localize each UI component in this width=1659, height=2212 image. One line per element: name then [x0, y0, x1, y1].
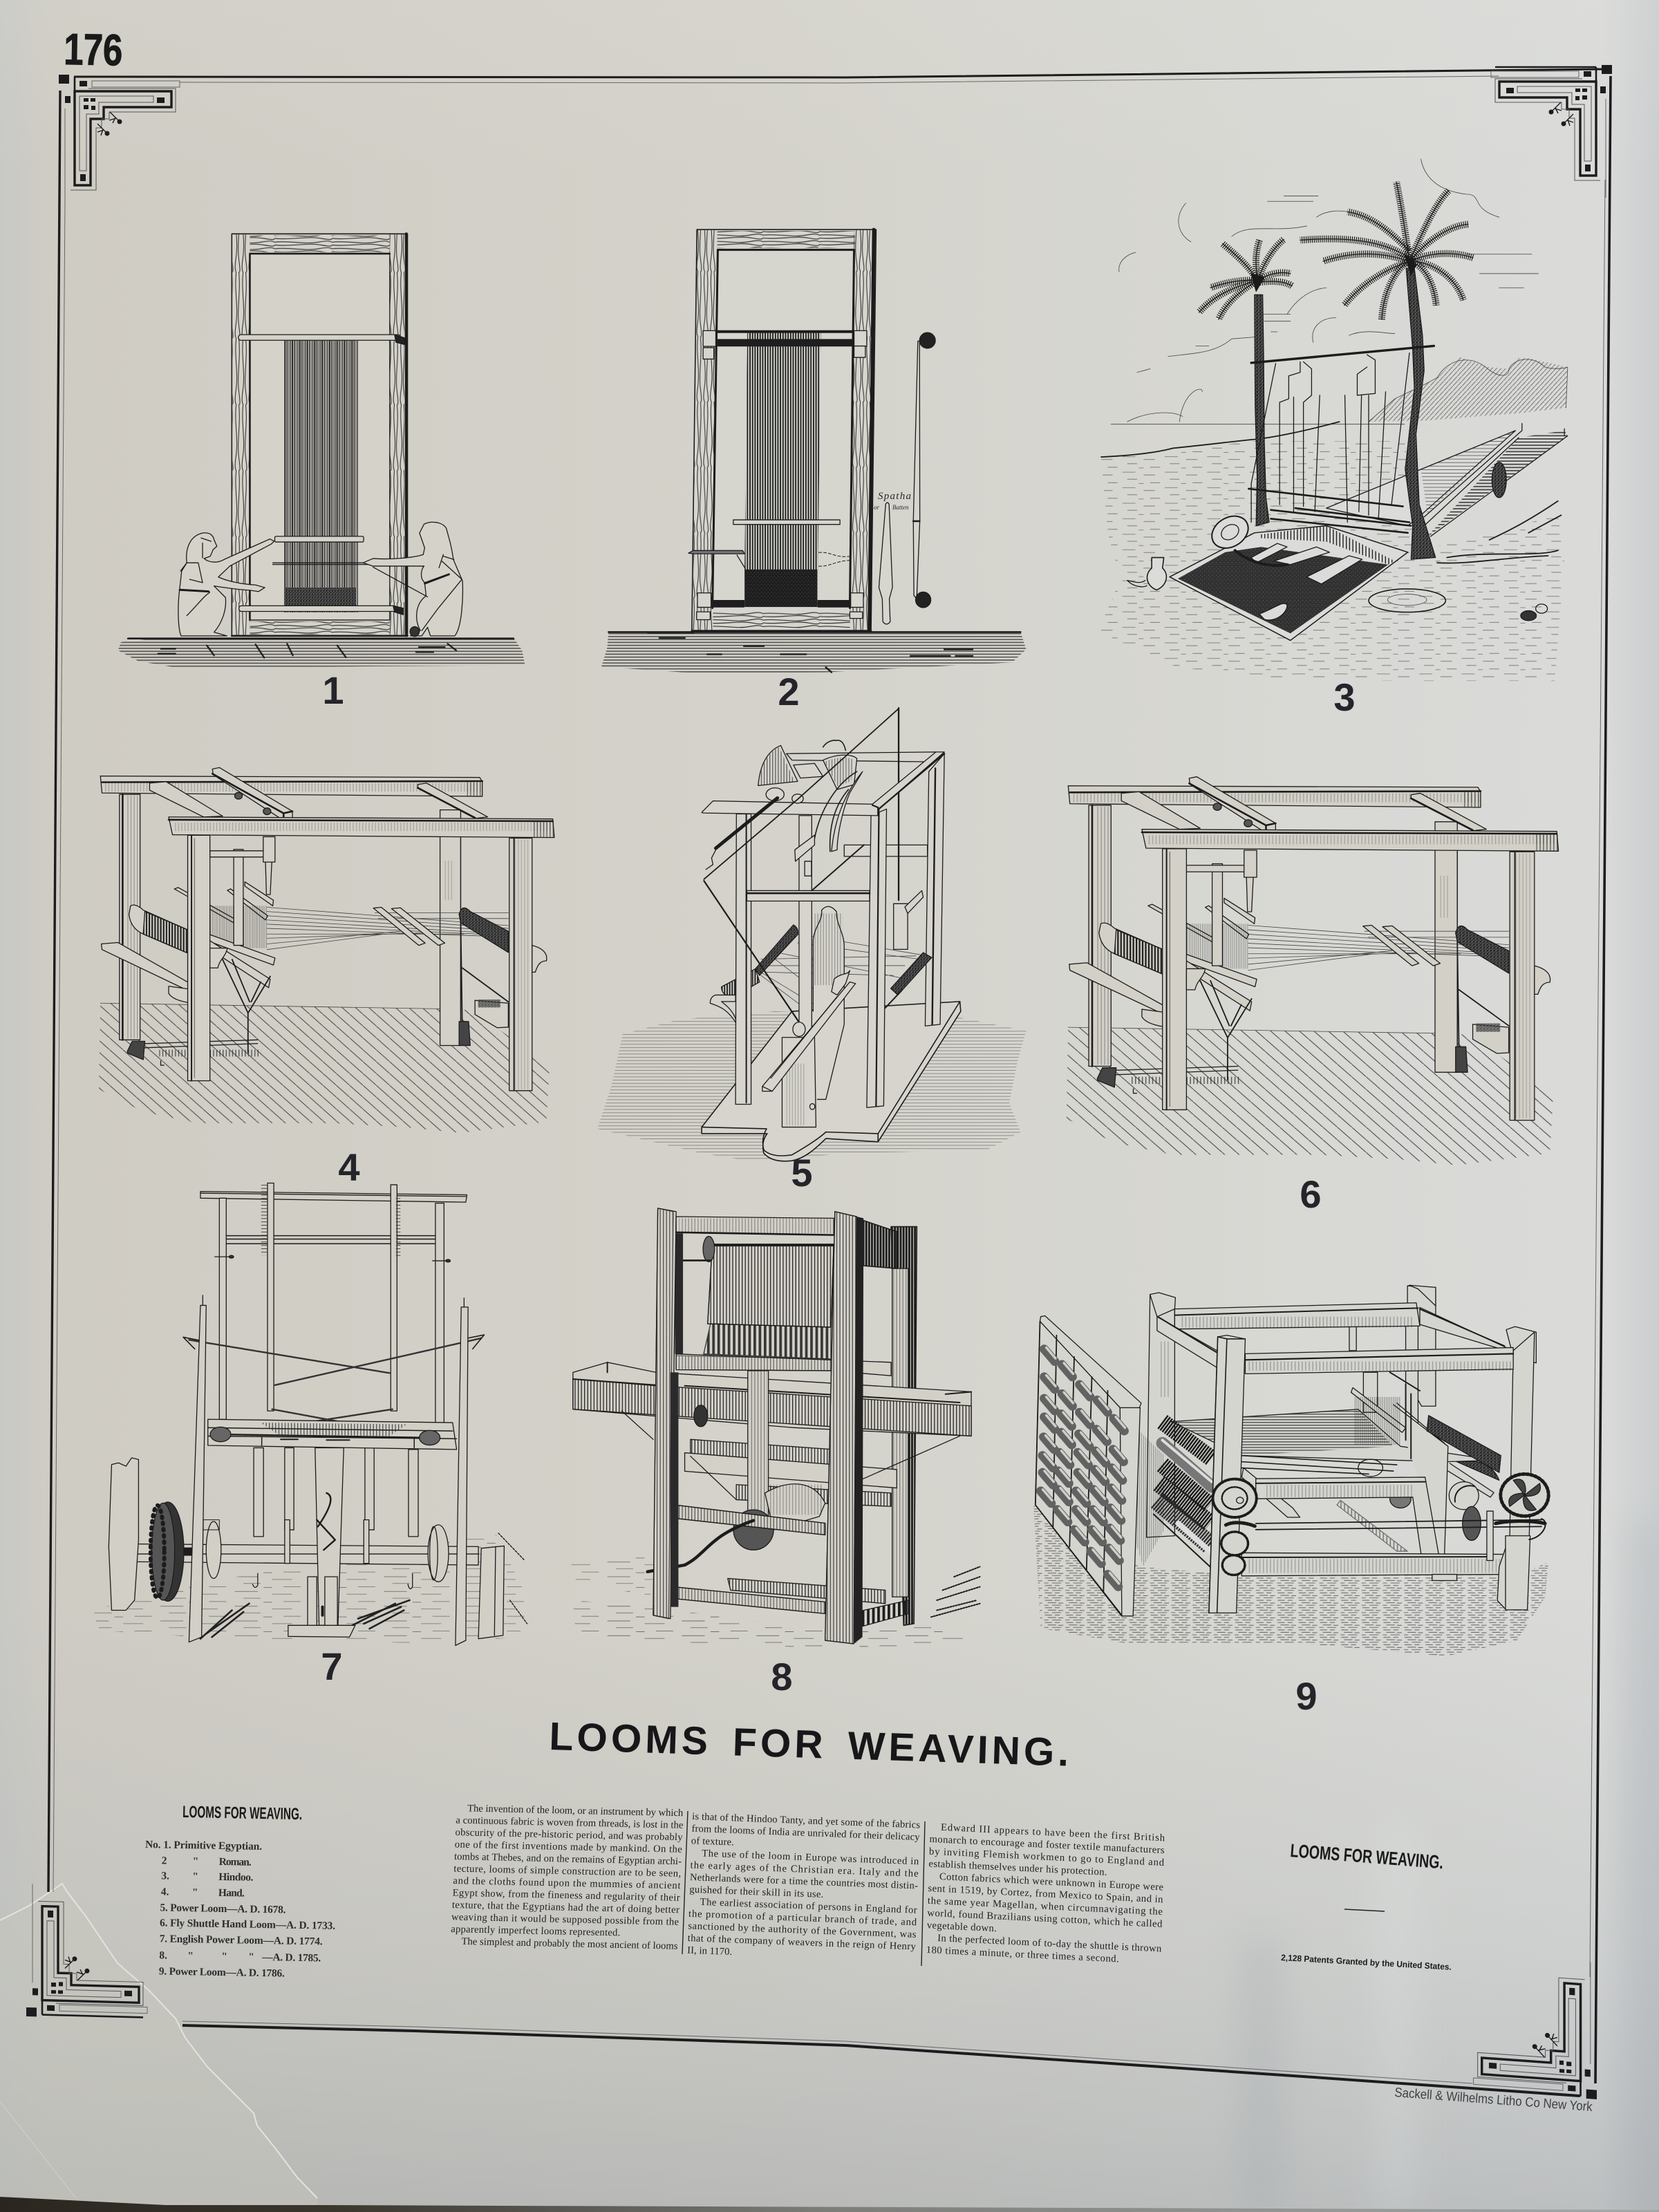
dark bottom edge — [0, 2197, 1659, 2212]
back posts — [120, 794, 460, 1045]
batten bay — [208, 1419, 457, 1450]
spatha label: or — [874, 504, 879, 511]
lease rods — [373, 907, 444, 946]
crossing cords — [189, 1338, 481, 1436]
corner: top right — [1491, 65, 1612, 198]
weight box — [462, 968, 508, 1028]
text column 3 — [926, 1821, 1165, 1967]
rods — [238, 335, 404, 615]
back right post — [925, 753, 944, 1026]
loom 3: Hindoo — [1098, 159, 1568, 719]
number 6: 6 — [1300, 1172, 1322, 1216]
bobbin creel — [1035, 1315, 1141, 1616]
upper frame — [200, 1192, 467, 1423]
woven cloth — [284, 588, 356, 606]
list of looms: Hindoo. — [218, 1871, 254, 1884]
text column 2: the promotion of a particular branch of trade, and — [688, 1909, 917, 1928]
cross beams — [149, 767, 487, 820]
list of looms: 9. Power Loom—A. D. 1786. — [159, 1965, 285, 1980]
corner: bottom right — [1474, 1954, 1597, 2099]
text column 3: by inviting Flemish workmen to go to England and — [929, 1846, 1165, 1868]
text column 1: apparently imperfect looms represented. — [451, 1924, 621, 1938]
warp threads — [744, 331, 821, 570]
warp rollers — [1154, 1422, 1212, 1566]
figure: left woman — [178, 533, 274, 636]
torn corner — [0, 1884, 317, 2212]
number 3: 3 — [1333, 675, 1356, 719]
text column 2: of texture. — [691, 1835, 734, 1848]
text column 1: a continuous fabric is woven from threads, is lost in the — [456, 1815, 684, 1831]
shuttle tool — [913, 332, 935, 608]
ground — [118, 638, 525, 667]
text column 2: guished for their skill in its use. — [689, 1884, 824, 1900]
list of looms: " — [193, 1855, 198, 1867]
spatha label: Batten — [892, 504, 909, 511]
base board — [702, 1002, 961, 1161]
text column 1: weaving than it would be supposed possible from the — [451, 1912, 679, 1928]
warp threads — [267, 907, 508, 950]
warp sheet — [1171, 1372, 1501, 1555]
hanging loom frame — [1248, 346, 1434, 533]
loom 8: English power loom — [570, 1208, 980, 1698]
loom 7: English power loom — [91, 1183, 530, 1688]
figure: right woman — [363, 522, 462, 637]
text column 3: vegetable down. — [927, 1920, 997, 1934]
list of looms: " — [248, 1951, 254, 1963]
sley bars — [673, 1505, 908, 1629]
ground hatching — [597, 1011, 1027, 1161]
list of looms: Hand. — [218, 1887, 245, 1900]
list of looms: No. 1. Primitive Egyptian. — [145, 1839, 262, 1853]
centre lever stack — [288, 1447, 355, 1637]
right divider — [1344, 1909, 1385, 1911]
pit with weaver — [1170, 510, 1408, 640]
loom 1: primitive Egyptian — [118, 234, 525, 712]
column rule 1 — [682, 1811, 688, 1954]
number 2: 2 — [778, 670, 800, 713]
number 5: 5 — [791, 1151, 813, 1194]
top rail — [702, 752, 944, 816]
lower legs — [252, 1447, 418, 1588]
heddle rod and shuttle — [688, 520, 850, 569]
frame — [692, 229, 876, 631]
number 1: 1 — [322, 668, 344, 712]
palm fronds — [1199, 182, 1473, 319]
patents note: 2,128 Patents Granted by the United States. — [1281, 1953, 1452, 1972]
text column 2: is that of the Hindoo Tanty, and yet some of the fabrics — [692, 1811, 921, 1831]
printer credit: Sackell & Wilhelms Litho Co New York — [1394, 2086, 1593, 2115]
back post — [856, 1218, 917, 1625]
threads — [1136, 1431, 1164, 1566]
front column and batten — [762, 890, 924, 1127]
ground strokes — [91, 1533, 530, 1644]
text column 2: The use of the loom in Europe was introduced in — [702, 1848, 919, 1867]
side arm — [102, 942, 192, 1003]
warp beam — [459, 908, 508, 1045]
front posts and rails — [1150, 1293, 1536, 1613]
axle — [129, 1520, 478, 1565]
frame back — [1147, 1285, 1506, 1537]
corner: top left — [59, 75, 180, 207]
text column 1: The invention of the loom, or an instrument by which — [467, 1803, 684, 1819]
lower mechanism — [1241, 1459, 1494, 1557]
treadle cords — [223, 959, 270, 1053]
text column 2: from the looms of India are unrivaled for their delicacy — [691, 1824, 921, 1843]
column rule 2 — [921, 1821, 925, 1966]
hatched floor — [99, 1003, 550, 1133]
front right post — [825, 1212, 863, 1644]
text column 2: Netherlands were for a time the countries most distin- — [690, 1872, 918, 1892]
fan wheels and rollers — [704, 709, 899, 1024]
front posts — [188, 835, 547, 1091]
flywheels — [151, 1502, 449, 1601]
treadles — [127, 1040, 261, 1065]
text column 3: 180 times a minute, or three times a second. — [926, 1944, 1119, 1965]
warp beams — [710, 925, 932, 1024]
number 7: 7 — [321, 1644, 343, 1688]
text column 1: tecture, looms of simple construction are to be seen, — [453, 1864, 682, 1880]
lower rear frame — [685, 1436, 960, 1604]
corner: bottom left — [26, 1884, 147, 2020]
rear column and hood — [799, 816, 844, 1099]
text column 3: the same year Magellan, when circumnavigating the — [928, 1895, 1163, 1918]
bearing stump and block — [109, 1458, 504, 1639]
text column 3: world, found Brazilians using cotton, which he called — [927, 1908, 1163, 1930]
ground — [601, 632, 1027, 674]
list of looms: " — [187, 1950, 194, 1962]
text column 3: establish themselves under his protection. — [928, 1858, 1107, 1878]
text column 1 — [450, 1803, 684, 1952]
spatha label: Spatha — [878, 491, 911, 502]
ground strokes — [570, 1557, 980, 1651]
warp cloth — [703, 1237, 834, 1359]
list of looms: 3. — [161, 1870, 169, 1882]
drive shaft — [1226, 1511, 1546, 1560]
breast beam — [676, 1354, 891, 1532]
back beam — [100, 776, 482, 796]
number 4: 4 — [338, 1145, 360, 1189]
list of looms: " — [192, 1871, 198, 1882]
hanging harness — [261, 1183, 400, 1411]
back rail and cross bars — [787, 708, 936, 901]
top beams — [675, 1217, 834, 1354]
crank — [648, 1521, 753, 1572]
list of looms: 8. — [159, 1949, 167, 1962]
left heading: LOOMS FOR WEAVING. — [182, 1803, 302, 1824]
woven cloth — [744, 570, 817, 607]
text column 2: The earliest association of persons in England for — [700, 1897, 917, 1916]
list of looms: " — [192, 1886, 198, 1898]
text column 3: In the perfected loom of to-day the shuttle is thrown — [937, 1933, 1162, 1955]
text column 2: II, in 1170. — [687, 1945, 732, 1958]
right heading: LOOMS FOR WEAVING. — [1290, 1840, 1444, 1873]
front left post — [653, 1208, 678, 1619]
number 8: 8 — [771, 1655, 793, 1698]
list of looms: 2 — [162, 1855, 167, 1867]
bottom rail — [1241, 1553, 1506, 1580]
gears — [1212, 1474, 1548, 1575]
text column 3: sent in 1519, by Cortez, from Mexico to Spain, and in — [928, 1883, 1163, 1905]
text column 1: obscurity of the pre-historic period, and was probably — [455, 1827, 684, 1843]
palm trunks — [1255, 268, 1436, 559]
main title: LOOMS FOR WEAVING. — [549, 1714, 1069, 1775]
frame — [232, 234, 407, 636]
warp threads — [758, 933, 928, 1011]
spatha label — [874, 491, 911, 511]
reed and heddles — [174, 836, 275, 988]
list of looms: 5. Power Loom—A. D. 1678. — [160, 1902, 286, 1916]
ground texture and clouds — [1098, 159, 1564, 681]
shaded ground — [1033, 1505, 1548, 1656]
tall side posts — [189, 1295, 468, 1645]
text column 1: and the cloths found upon the mummies of ancient — [453, 1875, 681, 1891]
loom 6: fly shuttle hand loom — [1067, 777, 1559, 1216]
page number: 176 — [64, 24, 123, 75]
list of looms: 4. — [161, 1886, 169, 1898]
text column 1: texture, that the Egyptians had the art of doing better — [452, 1900, 679, 1915]
loom 9: power loom — [1033, 1285, 1548, 1718]
list of looms: —A. D. 1785. — [261, 1951, 321, 1964]
spatha tool — [879, 503, 892, 624]
text column 3: Cotton fabrics which were unknown in Europe were — [939, 1871, 1163, 1893]
warp plank — [1327, 424, 1568, 540]
roller and blocks — [697, 330, 867, 619]
number 9: 9 — [1295, 1674, 1318, 1718]
text column 2: that of the company of weavers in the reign of Henry — [688, 1933, 917, 1953]
cloth beam — [129, 905, 189, 954]
text column 1: Egypt show, from the fineness and regularity of their — [452, 1888, 680, 1904]
distant trees — [1369, 357, 1568, 422]
text column 2 — [687, 1811, 921, 1965]
list of looms: 7. English Power Loom—A. D. 1774. — [160, 1933, 323, 1948]
text column 3: Edward III appears to have been the first British — [941, 1822, 1165, 1844]
text column 3: monarch to encourage and foster textile manufacturers — [929, 1834, 1165, 1856]
list of looms: " — [221, 1951, 227, 1962]
list of looms — [143, 1839, 337, 1980]
loom 5: power loom — [597, 708, 1027, 1194]
text column 1: The simplest and probably the most ancient of looms — [461, 1936, 678, 1952]
pot, wheel and stones — [1127, 501, 1561, 621]
front posts — [735, 809, 886, 1107]
text column 1: one of the first inventions made by mankind. On the — [454, 1839, 682, 1855]
text column 1: tombs at Thebes, and on the remains of Egyptian archi- — [454, 1851, 682, 1867]
text column 2: the early ages of the Christian era. Italy and the — [690, 1859, 919, 1880]
text column 2: sanctioned by the authority of the Government, was — [688, 1920, 917, 1940]
list of looms: 6. Fly Shuttle Hand Loom—A. D. 1733. — [160, 1917, 335, 1932]
drum — [694, 1405, 825, 1550]
loom 4: hand loom — [99, 767, 554, 1189]
front beam — [169, 817, 554, 838]
list of looms: Roman. — [219, 1856, 252, 1868]
warp threads — [284, 338, 358, 612]
trough — [573, 1362, 971, 1439]
loom 2: Roman — [601, 229, 1027, 713]
